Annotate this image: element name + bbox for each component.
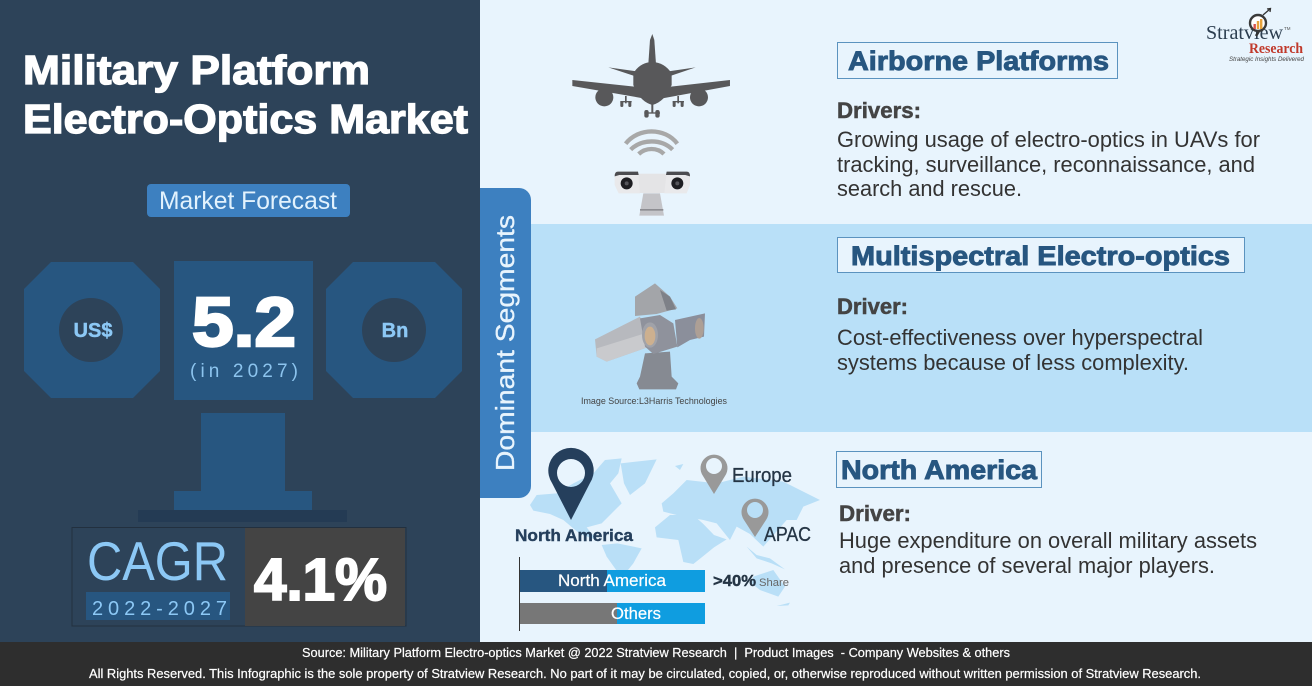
drivers text: Growing usage of electro-optics in UAVs for: [837, 127, 1260, 152]
panel: market forecast: [0, 0, 480, 642]
CAGR box: 4.1%: [254, 547, 387, 613]
panel: airborne platforms text: [837, 42, 1260, 201]
panel: multispectral band: [480, 224, 1312, 432]
background: right side: [480, 0, 1312, 642]
icon: airplane: [572, 34, 730, 118]
icon: wireless signal: [626, 131, 677, 154]
drivers text: Drivers:: [837, 98, 921, 123]
logo: stratview research: Stratview: [1206, 22, 1284, 44]
tab: dominant segments: Dominant Segments: [490, 215, 520, 471]
chart: world map: [530, 458, 820, 606]
title: Electro-Optics Market: [23, 96, 468, 142]
panel: north america text: [836, 452, 1257, 578]
footer: Source: Military Platform Electro-optics Market @ 2022 Stratview Research | Product Images - Company Websites & others: [302, 646, 1010, 660]
bar: others: Others: [611, 605, 661, 623]
unit octagon: [326, 262, 462, 398]
share label: [713, 573, 789, 590]
heading: north america: North America: [841, 455, 1038, 485]
forecast value: 5.2: [192, 283, 296, 361]
currency octagon: US$: [74, 320, 112, 342]
icon: north america pin: [515, 448, 634, 545]
drivers text: [837, 98, 1260, 201]
icon: apac pin: [741, 499, 811, 546]
share label: >40%: [713, 573, 756, 590]
logo: stratview research: TM: [1284, 26, 1291, 31]
forecast value: (in 2027): [190, 361, 298, 382]
CAGR box: 2022-2027: [92, 598, 227, 620]
drivers text: search and rescue.: [837, 176, 1022, 201]
image source caption: Image Source:L3Harris Technologies: [581, 396, 727, 407]
unit octagon: Bn: [382, 320, 408, 342]
driver text: [837, 294, 1203, 375]
chart: market share bars: [519, 557, 789, 631]
driver text: [839, 501, 1257, 578]
driver text: Driver:: [837, 294, 908, 319]
title: Military Platform: [23, 47, 370, 93]
tab: dominant segments: [480, 188, 531, 498]
icon: europe pin: Europe: [732, 465, 792, 487]
driver text: Driver:: [839, 501, 911, 526]
bar: others: [520, 603, 705, 624]
heading: airborne platforms: Airborne Platforms: [848, 46, 1109, 76]
icon: apac pin: APAC: [764, 524, 811, 546]
icon: europe pin: [701, 455, 792, 494]
driver text: and presence of several major players.: [839, 553, 1215, 578]
title: [23, 47, 468, 142]
logo: stratview research: [1206, 8, 1305, 63]
driver text: Huge expenditure on overall military assets: [839, 528, 1257, 553]
pedestal: [138, 413, 347, 522]
share label: Share: [759, 577, 789, 589]
bar: north america: North America: [558, 572, 667, 590]
panel: multispectral text: [837, 238, 1244, 375]
icon: north america pin: North America: [515, 526, 634, 545]
currency octagon: [24, 262, 160, 398]
logo: stratview research: Research: [1249, 41, 1304, 57]
icon: camera turret: [615, 172, 690, 216]
driver text: systems because of less complexity.: [837, 350, 1189, 375]
logo: stratview research: Strategic Insights Delivered: [1229, 57, 1305, 63]
CAGR box: [72, 528, 406, 626]
image: targeting sensor: [595, 283, 705, 389]
heading: multispectral electro-optics: Multispectral Electro-optics: [851, 241, 1230, 271]
forecast value: [174, 261, 313, 400]
CAGR box: CAGR: [87, 530, 228, 592]
drivers text: tracking, surveillance, reconnaissance, and: [837, 152, 1255, 177]
footer: [0, 642, 1312, 686]
driver text: Cost-effectiveness over hyperspectral: [837, 325, 1203, 350]
footer: All Rights Reserved. This Infographic is the sole property of Stratview Research. No part of it may be circulated, copied, or, otherwise reproduced without written permission of Stratview Research.: [89, 667, 1201, 681]
market forecast pill: Market Forecast: [159, 187, 337, 215]
icon: magnifier chart: [1250, 8, 1270, 36]
bar: north america: [520, 570, 705, 592]
